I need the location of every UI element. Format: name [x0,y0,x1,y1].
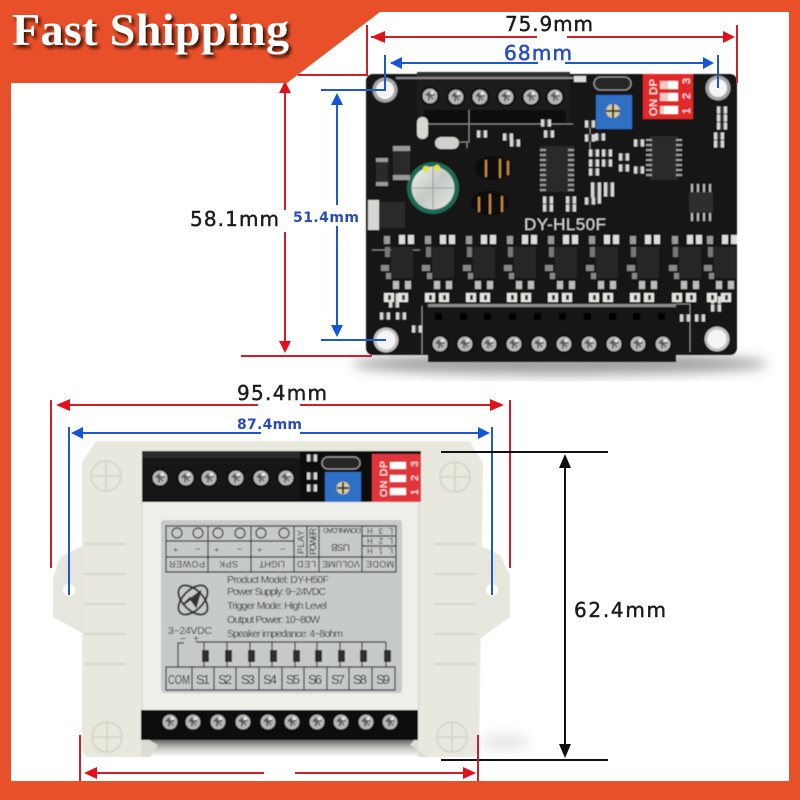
top terminal block [396,72,574,125]
blue potentiometer [325,472,361,502]
terminal table: SPK [219,559,238,569]
terminal table: + [214,545,219,555]
specification text: Power Supply: 9~24VDC [227,586,326,598]
title: Fast Shipping: Fast Shipping [12,4,289,55]
switch wiring diagram [178,642,391,667]
panel: PCB board photo [352,72,768,375]
terminal table: PLAY [296,530,306,554]
optocoupler row [381,235,737,302]
input terminal row: S2 [218,672,232,687]
input terminal row: S4 [263,672,277,687]
dimension: board hole spacing 68mm [321,41,718,90]
red DIP switch: ON DP [378,461,390,497]
blue potentiometer [596,95,632,129]
dimension: module height 62.4mm [441,452,666,760]
input terminal row: S8 [353,672,367,687]
input terminal row: S6 [308,672,322,687]
specification text: Product Model: DY-H50F [227,574,329,586]
dimension: board outer width 75.9mm: 75.9mm [505,12,593,36]
terminal table: − [280,544,285,554]
board model text: DY-HL50F [524,215,606,234]
red DIP switch: 1 2 3 [681,78,693,114]
SMD components [380,106,727,332]
crystal [435,137,459,149]
red DIP switch [372,454,421,502]
terminal table: − [195,544,200,554]
dimension: module hole spacing 87.4mm: 87.4mm [237,417,302,433]
input terminal row: S5 [286,672,300,687]
terminal table: DOWNLOAD [322,526,361,535]
terminal table: USB [331,541,350,552]
red DIP switch [643,74,693,119]
icon: label logo [173,580,213,620]
specification text: Trigger Mode: High Level [227,600,327,612]
input terminal row [166,667,395,690]
product label [161,520,402,693]
IC chips [368,136,713,230]
dimension: board outer width 75.9mm [367,12,737,83]
terminal table: L 2 H [367,536,393,545]
bottom connector [141,710,418,740]
dimension: module lower width [80,735,478,782]
mounting tabs [53,545,510,640]
terminal table: LED [296,559,316,569]
terminal table: POWER [168,559,205,569]
specification text: − [180,633,186,645]
inductors [462,150,524,220]
terminal table: + [257,545,262,555]
panel: enclosed module photo [53,441,530,757]
corner screw covers [91,461,470,752]
terminal table: POWER [308,528,318,555]
red DIP switch: 1 2 3 [409,461,421,495]
dimension: module hole spacing 87.4mm [69,417,492,595]
input terminal row: S3 [241,672,255,687]
bottom terminal block [428,304,676,362]
electrolytic capacitor [406,159,460,214]
terminal table: − [237,544,242,554]
terminal table: VOLUME [322,559,360,569]
mounting holes [372,76,730,352]
input terminal row: S7 [331,672,345,687]
specification text: + [193,633,199,645]
dimension: board hole spacing 68mm: 68mm [504,41,572,65]
terminal table: + [173,545,178,555]
board traces [372,110,690,354]
terminal table: L 3 H [367,526,393,535]
specification text [168,574,343,645]
dimension: board outer height 58.1mm [190,75,372,356]
housing [82,441,483,757]
dimension: module outer width 95.4mm: 95.4mm [237,381,327,405]
input terminal row: S1 [196,672,210,687]
input terminal row: S9 [376,672,390,687]
dimension: module outer width 95.4mm [51,381,510,568]
top connectors [142,451,421,502]
dimension: board hole height 51.4mm: 51.4mm [293,210,359,226]
input terminal row: COM [168,672,190,687]
dimension: board outer height 58.1mm: 58.1mm [190,207,279,231]
terminal table: L 1 H [367,546,393,555]
dimension: board hole height 51.4mm [293,93,386,340]
specification text: 3~24VDC [168,625,212,637]
red DIP switch: ON DP [648,79,660,116]
terminal table: MODE [366,559,394,569]
micro USB connector [574,76,631,90]
dimension: module height 62.4mm: 62.4mm [574,598,666,622]
terminal table [166,526,396,572]
terminal table: LIGHT [258,559,285,569]
specification text: Output Power: 10~80W [227,614,320,626]
specification text: Speaker impedance: 4~8ohm [227,628,343,640]
